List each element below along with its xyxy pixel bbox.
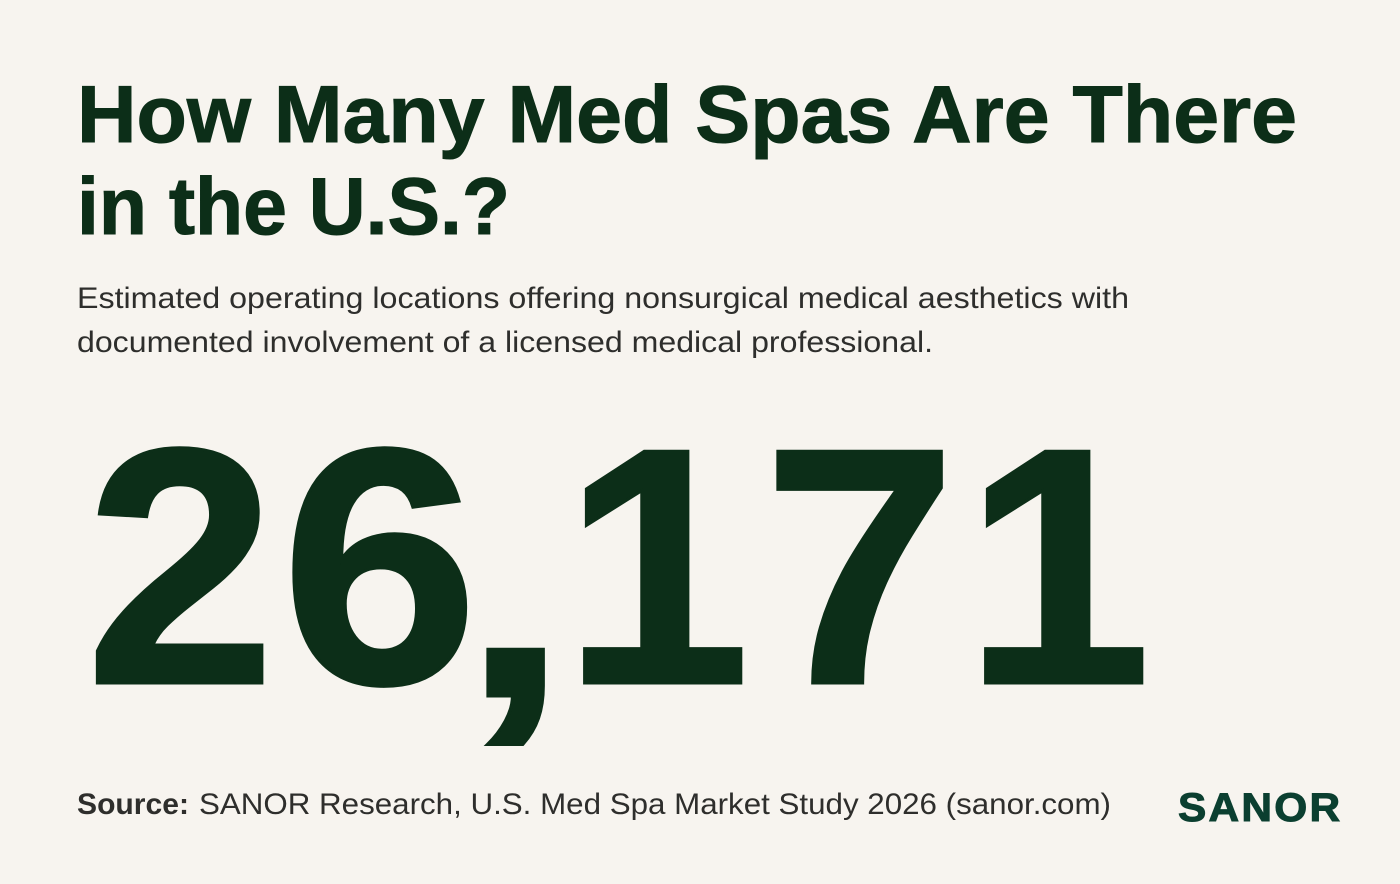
big number: 1 <box>964 379 1151 755</box>
source line: Source: <box>77 788 189 821</box>
title <box>77 70 1297 252</box>
title: How Many Med Spas Are There <box>77 70 1297 160</box>
subtitle: Estimated operating locations offering nonsurgical medical aesthetics with <box>77 282 1129 315</box>
logo: SANOR: SANOR <box>1178 785 1340 830</box>
source line: SANOR Research, U.S. Med Spa Market Study 2026 (sanor.com) <box>199 788 1111 821</box>
title: in the U.S.? <box>77 162 510 252</box>
big number: 2 <box>86 378 275 755</box>
big number: 1 <box>564 379 750 755</box>
big number: 7 <box>763 378 957 755</box>
subtitle <box>77 282 1129 359</box>
subtitle: documented involvement of a licensed medical professional. <box>77 326 933 359</box>
big number <box>86 378 1151 763</box>
big number: 6 <box>281 379 478 755</box>
big number: , <box>461 412 569 763</box>
